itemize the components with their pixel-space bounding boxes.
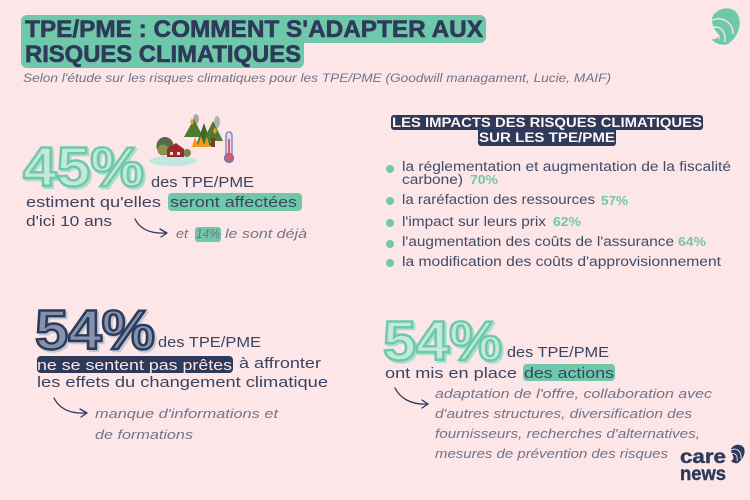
highlight: ne se sentent pas prêtes: ne se sentent pas prêtes — [37, 357, 232, 374]
logo: care news: news — [680, 464, 726, 485]
note: list of actions: d'autres structures, diversification des — [435, 406, 693, 421]
note: manque d'informations: de formations — [95, 427, 194, 442]
number: 54% navy: 54% — [35, 298, 155, 361]
title — [21, 15, 486, 68]
note: et 14% le sont déjà: et — [176, 226, 190, 241]
heading: impacts — [391, 115, 703, 146]
note: list of actions — [435, 386, 713, 461]
stat block: 45% — [23, 135, 307, 242]
item: assurance: l'augmentation des coûts de l'assurance — [402, 234, 674, 249]
subtitle: Selon l'étude sur les risques climatiques pour les TPE/PME (Goodwill managament, Lucie, MAIF) — [23, 71, 611, 85]
number: 45%: 45% — [23, 135, 144, 198]
item: prix — [386, 214, 581, 229]
panel: impacts — [386, 115, 731, 269]
icon: burning forest — [184, 114, 223, 147]
note: manque d'informations — [95, 406, 280, 442]
stat block: 54% not ready — [35, 298, 328, 442]
logo: top right wave — [711, 8, 740, 45]
note: list of actions: adaptation de l'offre, collaboration avec — [435, 386, 713, 401]
item: prix: 62% — [553, 215, 581, 229]
text: les effets du changement climatique: les effets du changement climatique — [37, 374, 328, 391]
item: fiscalité carbone: 70% — [470, 173, 498, 187]
text: à affronter: à affronter — [239, 355, 321, 372]
logo: care news — [680, 445, 745, 485]
number: 54% green: 54% — [385, 311, 504, 374]
heading: impacts: LES IMPACTS DES RISQUES CLIMATIQUES — [392, 115, 702, 130]
item: ressources — [386, 192, 628, 208]
icon: thermometer — [224, 132, 234, 162]
arrow — [135, 219, 167, 237]
item: prix: l'impact sur leurs prix — [402, 214, 546, 229]
item: fiscalité carbone — [386, 159, 731, 187]
logo: care news: care — [680, 447, 726, 468]
text: d'ici 10 ans: d'ici 10 ans — [26, 213, 112, 230]
text: estiment qu'elles: estiment qu'elles — [26, 194, 161, 211]
note: et 14% le sont déjà: le sont déjà — [225, 226, 307, 241]
item: ressources: 57% — [601, 194, 628, 208]
item: fiscalité carbone: la réglementation et augmentation de la fiscalité — [402, 159, 731, 174]
text: des TPE/PME: des TPE/PME — [507, 344, 609, 361]
arrow — [395, 388, 428, 408]
number: 54% green: 54% — [383, 309, 502, 372]
stat block: 54% actions — [383, 309, 713, 461]
heading: impacts: SUR LES TPE/PME — [479, 130, 615, 145]
item: ressources: la raréfaction des ressources — [402, 192, 595, 207]
title: TPE/PME : COMMENT S'ADAPTER AUX — [25, 16, 483, 43]
text: des TPE/PME: des TPE/PME — [158, 334, 261, 351]
note: et 14% le sont déjà: 14% — [196, 226, 220, 241]
item: fiscalité carbone: carbone) — [402, 172, 463, 187]
item: assurance: 64% — [678, 235, 706, 249]
highlight: des actions: des actions — [524, 365, 614, 382]
number: 54% navy: 54% — [37, 300, 157, 363]
item: approvisionnement: la modification des coûts d'approvisionnement — [402, 254, 721, 269]
icon: flooded house — [149, 137, 197, 166]
note: list of actions: fournisseurs, recherches d'alternatives, — [435, 426, 700, 441]
note: manque d'informations: manque d'informations et — [95, 406, 280, 421]
text: des TPE/PME: des TPE/PME — [151, 174, 254, 191]
note: et 14% le sont déjà — [176, 226, 307, 242]
number: 45%: 45% — [25, 137, 146, 200]
note: list of actions: mesures de prévention des risques — [435, 446, 669, 461]
arrow — [54, 398, 87, 417]
text: ont mis en place: ont mis en place — [385, 365, 517, 382]
highlight: seront affectées: seront affectées — [170, 194, 297, 211]
title: RISQUES CLIMATIQUES — [25, 41, 301, 68]
